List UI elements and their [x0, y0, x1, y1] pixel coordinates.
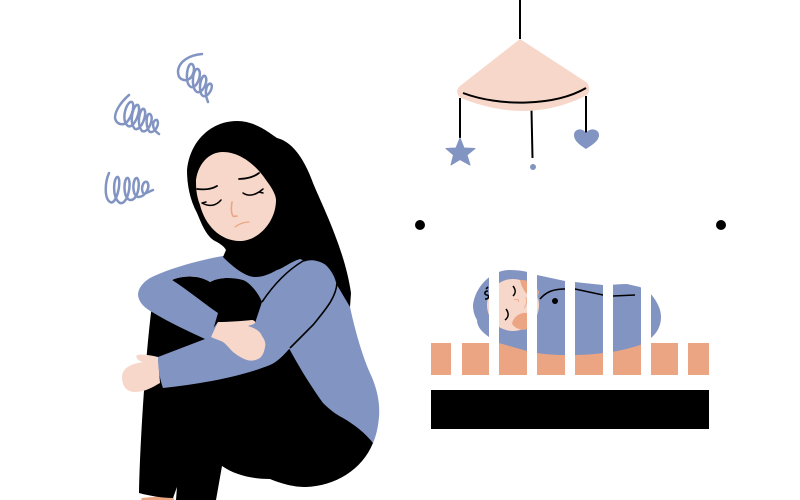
lower arm — [158, 260, 337, 388]
strings — [460, 0, 586, 158]
stress squiggles — [106, 54, 212, 203]
hand on arm — [211, 320, 265, 361]
crib rails — [431, 343, 709, 375]
left eye — [202, 200, 221, 205]
shirt torso — [223, 256, 379, 443]
crib white slats — [489, 260, 651, 375]
heart — [574, 129, 599, 149]
swaddle — [473, 270, 661, 355]
sleeve seam — [262, 259, 337, 348]
swaddled baby — [473, 270, 661, 355]
canopy line — [463, 88, 586, 103]
cheek — [512, 313, 527, 330]
squiggle bottom — [106, 173, 153, 203]
mouth — [235, 222, 249, 227]
face — [196, 152, 276, 241]
hand on leg — [122, 355, 160, 392]
baby face — [487, 279, 539, 331]
upper arm — [138, 256, 243, 339]
swaddle button — [552, 298, 558, 304]
squiggle middle — [115, 95, 159, 134]
swaddle strap — [540, 289, 635, 299]
star — [446, 138, 475, 165]
crib base — [431, 390, 709, 429]
trousers — [139, 305, 373, 500]
canopy — [457, 39, 589, 111]
facial features — [197, 173, 263, 227]
baby mobile — [446, 0, 599, 170]
crib post dots — [415, 220, 726, 230]
left post — [415, 220, 425, 230]
hair patch — [520, 280, 539, 300]
raised knee — [172, 276, 270, 330]
right eye — [243, 189, 263, 195]
foot — [141, 495, 174, 500]
right post — [716, 220, 726, 230]
right brow — [239, 173, 259, 179]
mother figure — [122, 121, 379, 500]
baby nose — [514, 297, 526, 308]
left brow — [197, 186, 217, 189]
baby eyes — [505, 286, 515, 320]
hijab — [187, 121, 351, 307]
squiggle top — [178, 54, 212, 102]
dot — [530, 164, 536, 170]
baby hair curl — [485, 287, 489, 299]
nose — [231, 202, 237, 216]
